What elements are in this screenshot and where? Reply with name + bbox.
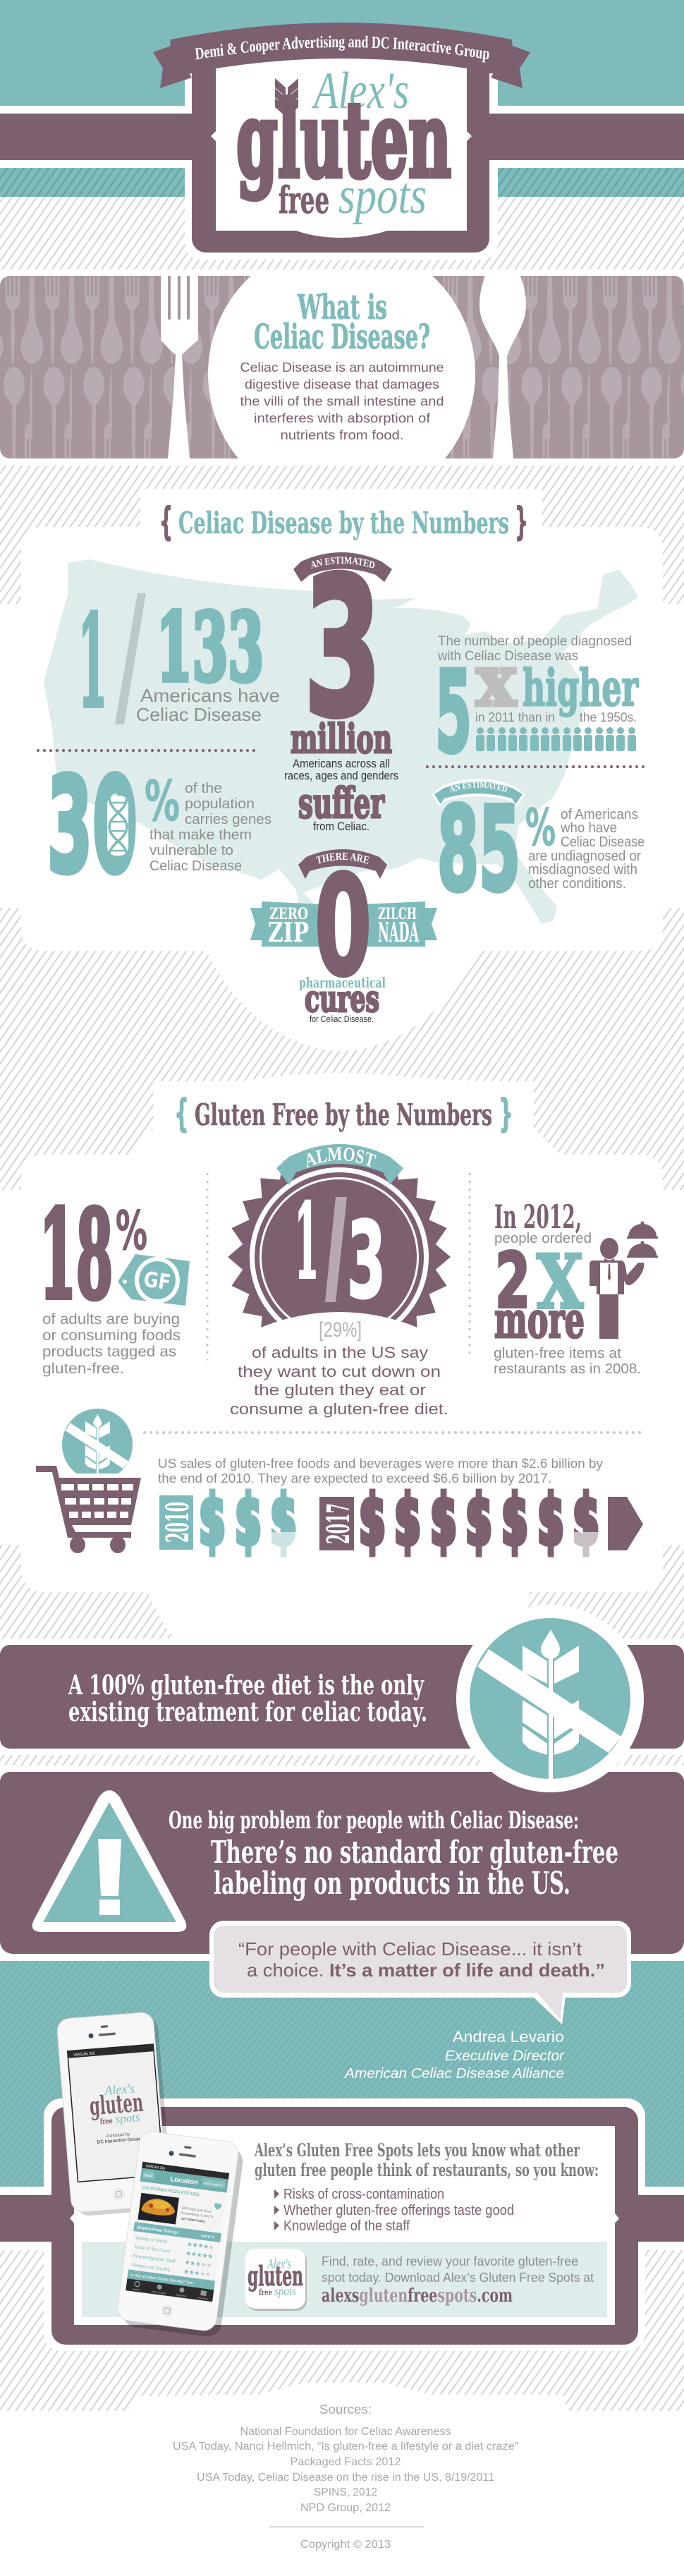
stat: 30 percent: vulnerable to bbox=[149, 843, 233, 858]
heading: { bbox=[159, 499, 173, 544]
stat: 3 million: 3 bbox=[304, 537, 381, 759]
icon: wheat bbox=[275, 78, 298, 116]
sales text: US sales of gluten-free foods and beverages were more than $2.6 billion by bbox=[158, 1456, 604, 1471]
stat: 18 percent bbox=[39, 1183, 190, 1377]
logo shield bbox=[153, 23, 530, 260]
stat: 0 cures: THERE ARE bbox=[316, 852, 370, 864]
icon: warning triangle bbox=[32, 1790, 186, 1932]
dollar chart 2010: 2010 bbox=[160, 1502, 196, 1543]
app icon: Alex's bbox=[267, 2256, 291, 2272]
stat: one third badge: ALMOST bbox=[306, 1147, 377, 1168]
map of the United States bbox=[44, 559, 639, 924]
footer: sources: SPINS, 2012 bbox=[314, 2486, 377, 2498]
phone: splash screen: gluten bbox=[88, 2088, 145, 2122]
stat: 2x more: more bbox=[494, 1291, 585, 1349]
ribbon text: Demi & Cooper Advertising and DC Interactive Group bbox=[195, 35, 489, 63]
dollar chart 2010: $ bbox=[199, 1481, 226, 1561]
download text: Find, rate, and review your favorite gluten-free bbox=[322, 2254, 578, 2268]
screen: Search bbox=[133, 2288, 140, 2292]
body text: Celiac Disease is an autoimmune bbox=[240, 360, 444, 375]
bullet list: Knowledge of the staff bbox=[283, 2218, 410, 2234]
screen: Is this location Celiac friendly? Yes bbox=[130, 2273, 193, 2285]
stat: 2x more bbox=[494, 1198, 658, 1377]
dollar chart 2017: $ bbox=[501, 1481, 528, 1561]
dollar chart 2017: $ bbox=[537, 1481, 564, 1561]
quote attribution: Andrea Levario bbox=[453, 2028, 564, 2046]
phone: splash screen: spots bbox=[115, 2110, 141, 2126]
stat: 3 million bbox=[284, 537, 398, 833]
stat: 30 percent: 30 bbox=[47, 749, 138, 902]
footer: sources: USA Today, Celiac Disease on the rise in the US, 8/19/2011 bbox=[197, 2472, 494, 2484]
stat: one third badge: 3 bbox=[347, 1200, 386, 1323]
banner: 100% gluten-free diet: existing treatment for celiac today. bbox=[68, 1696, 427, 1727]
logo text: spots bbox=[338, 167, 427, 225]
stat: one third badge: [29%] bbox=[319, 1318, 362, 1342]
screen: Add Location bbox=[152, 2290, 166, 2295]
stat: 5x higher: the 1950s. bbox=[580, 710, 637, 724]
stat: 18 percent: gluten-free. bbox=[42, 1361, 124, 1377]
screen: Gluten-Free Ratings bbox=[136, 2225, 179, 2235]
stat: 0 cures: ZERO bbox=[269, 905, 308, 923]
quote attribution: American Celiac Disease Alliance bbox=[344, 2066, 564, 2082]
panel: what is celiac disease bbox=[0, 276, 684, 458]
dollar chart 2017: 2017 bbox=[321, 1503, 357, 1544]
dollar chart 2017 bbox=[319, 1481, 643, 1561]
screen: Knowledgeable Staff bbox=[133, 2254, 176, 2264]
problem text bbox=[169, 1806, 618, 1902]
quote attribution: Executive Director bbox=[445, 2048, 565, 2064]
screen: Add Location bbox=[204, 2181, 223, 2187]
dollar chart 2017: $ bbox=[394, 1481, 421, 1561]
dollar chart 2010 bbox=[159, 1481, 300, 1561]
stat: 30 percent: population bbox=[185, 796, 255, 812]
bullet list: Whether gluten-free offerings taste good bbox=[283, 2203, 514, 2218]
screen: ★★★★★ bbox=[185, 2250, 214, 2260]
heading: Celiac Disease? bbox=[254, 317, 430, 357]
stat: 1 in 133: Americans have bbox=[140, 685, 280, 706]
stat: 5x higher bbox=[435, 634, 639, 778]
stat: 3 million: races, ages and genders bbox=[284, 769, 398, 782]
stat: 30 percent: carries genes bbox=[185, 812, 271, 827]
banner: 100% gluten-free diet: A 100% gluten-free diet is the only bbox=[68, 1669, 425, 1701]
promo text bbox=[254, 2140, 599, 2180]
screen: VIRGIN 3G bbox=[145, 2164, 165, 2171]
download text bbox=[322, 2254, 594, 2307]
phone: splash screen: DC Interactive Group bbox=[97, 2137, 140, 2145]
heading: } bbox=[499, 1091, 513, 1136]
phone: splash screen: Alex's bbox=[104, 2081, 135, 2098]
stat: 1 in 133: Celiac Disease bbox=[136, 704, 262, 725]
screen: 1060 East Golf Road bbox=[181, 2206, 212, 2213]
app icon: spots bbox=[274, 2284, 296, 2298]
download text: alexsglutenfreespots.com bbox=[322, 2285, 513, 2307]
app icon: free bbox=[259, 2288, 272, 2297]
stat: 2x more: In 2012, bbox=[494, 1198, 582, 1236]
stat: 18 percent: % bbox=[116, 1199, 147, 1262]
stat: one third badge: 1 bbox=[295, 1181, 319, 1302]
stat: 85 percent: other conditions. bbox=[528, 876, 626, 892]
app icon bbox=[245, 2249, 307, 2311]
stat: 2x more: X bbox=[537, 1238, 583, 1325]
screen: Restaurant Facility bbox=[131, 2263, 171, 2273]
stat: 2x more: gluten-free items at bbox=[494, 1346, 621, 1361]
screen: ★★★★★ bbox=[185, 2259, 212, 2269]
people row bbox=[476, 727, 636, 751]
arrow bbox=[608, 1497, 643, 1550]
heading: Celiac Disease by the Numbers bbox=[178, 506, 509, 540]
stat: 85 percent: 85 bbox=[437, 782, 520, 917]
dollar chart 2010: $ bbox=[270, 1481, 297, 1561]
footer: sources: USA Today, Nanci Hellmich, “Is gluten-free a lifestyle or a diet craze” bbox=[173, 2441, 518, 2453]
stat: 3 million: suffer bbox=[298, 779, 385, 827]
stat: 18 percent: or consuming foods bbox=[42, 1328, 181, 1344]
screen: ★★★★★ bbox=[183, 2268, 212, 2278]
stat: 0 cures: NADA bbox=[378, 916, 419, 948]
screen bbox=[126, 2162, 229, 2302]
icon: fork bbox=[161, 276, 198, 458]
stat: 0 cures bbox=[250, 846, 437, 1024]
banner: 100% gluten-free diet bbox=[0, 1645, 684, 1749]
icon: shopping cart with wheat bbox=[36, 1409, 148, 1553]
screen: Taste of the Food bbox=[134, 2244, 171, 2254]
plate bbox=[208, 276, 475, 458]
footer: sources: NPD Group, 2012 bbox=[300, 2502, 391, 2514]
heading bbox=[159, 499, 528, 544]
icon: dna bbox=[107, 796, 128, 856]
stat: 5x higher: 5 bbox=[435, 646, 472, 778]
heading: { bbox=[174, 1091, 189, 1136]
body text: interferes with absorption of bbox=[254, 411, 431, 425]
footer: sources: Copyright © 2013 bbox=[300, 2539, 391, 2551]
footer: sources: Packaged Facts 2012 bbox=[291, 2456, 401, 2468]
sales text: the end of 2010. They are expected to exceed $6.6 billion by 2017. bbox=[158, 1471, 551, 1486]
bullet list bbox=[274, 2187, 514, 2234]
panel: gluten free by the numbers bbox=[21, 1073, 663, 1639]
body text: nutrients from food. bbox=[281, 427, 403, 442]
stat: 85 percent: % bbox=[525, 798, 556, 857]
stat: 85 percent: who have bbox=[560, 820, 617, 836]
speech bubble quote bbox=[209, 1921, 631, 2024]
stat: 30 percent: that make them bbox=[149, 827, 252, 843]
stat: 0 cures: for Celiac Disease. bbox=[310, 1014, 374, 1024]
logo text: free bbox=[279, 179, 329, 222]
screen: Back bbox=[144, 2173, 153, 2179]
screen: RATE IT bbox=[201, 2234, 214, 2240]
stat: 85 percent: Celiac Disease bbox=[561, 834, 645, 850]
stat: 30 percent: Celiac Disease bbox=[149, 858, 242, 874]
stat: one third badge: consume a gluten-free diet. bbox=[230, 1400, 448, 1418]
stat: 5x higher: x bbox=[476, 639, 517, 722]
screen: Schaumburg, IL 60173 bbox=[181, 2211, 214, 2218]
heading: Gluten Free by the Numbers bbox=[195, 1098, 492, 1132]
stat: 18 percent: of adults are buying bbox=[42, 1311, 180, 1328]
stat: one third badge: they want to cut down on bbox=[238, 1363, 441, 1380]
photo bbox=[138, 2193, 179, 2225]
stat: 2x more: people ordered bbox=[494, 1231, 592, 1246]
panel: celiac disease by the numbers: } bbox=[515, 499, 528, 544]
phone: splash screen bbox=[56, 2012, 173, 2217]
speech bubble quote: a choice. It’s a matter of life and death.” bbox=[247, 1960, 605, 1981]
panel: labeling problem bbox=[0, 1772, 684, 1954]
stat: 30 percent: % bbox=[145, 770, 180, 834]
phone: splash screen: free bbox=[99, 2116, 113, 2126]
teal section white gap bbox=[0, 1954, 684, 1961]
stat: 3 million: AN ESTIMATED bbox=[311, 557, 375, 569]
phone: splash screen: A product by bbox=[106, 2132, 130, 2139]
stat: one third badge: the gluten they eat or bbox=[254, 1381, 427, 1399]
stat: 2x more: 2 bbox=[495, 1237, 530, 1325]
body text: digestive disease that damages bbox=[245, 377, 439, 391]
stat: one third badge bbox=[124, 1144, 560, 1741]
dollar chart 2017: $ bbox=[465, 1481, 492, 1561]
stat: 0 cures: 0 bbox=[314, 846, 372, 1007]
screen: Variety of Menu bbox=[135, 2235, 168, 2244]
quote attribution bbox=[344, 2028, 565, 2082]
download text: spot today. Download Alex’s Gluten Free Spots at bbox=[322, 2271, 594, 2285]
stat: 5x higher: with Celiac Disease was bbox=[437, 649, 578, 664]
stat: 3 million: million bbox=[291, 716, 392, 763]
logo text: gluten bbox=[236, 78, 451, 201]
logo header bbox=[153, 23, 530, 260]
stat: 85 percent: of Americans bbox=[561, 807, 638, 822]
stat: 1 in 133: 1 bbox=[78, 588, 107, 736]
stat: 1 in 133 bbox=[78, 588, 280, 736]
heading bbox=[174, 1091, 513, 1136]
dollar chart 2017: $ bbox=[573, 1481, 599, 1561]
stat: 3 million: from Celiac. bbox=[313, 820, 370, 833]
stat: 85 percent: are undiagnosed or bbox=[528, 849, 641, 864]
body text bbox=[240, 360, 444, 442]
screen: ★★★★★ bbox=[187, 2241, 215, 2251]
dollar chart 2017: $ bbox=[430, 1481, 457, 1561]
panel: celiac disease by the numbers bbox=[21, 489, 663, 1051]
stat: one third badge: of adults in the US say bbox=[252, 1344, 429, 1361]
speech bubble quote: “For people with Celiac Disease... it isn’t bbox=[238, 1938, 582, 1960]
phone: splash screen: VIRGIN 3G bbox=[73, 2052, 95, 2058]
stat: 5x higher: in 2011 than in bbox=[475, 710, 555, 724]
logo text bbox=[236, 62, 451, 225]
stat: 2x more: restaurants as in 2008. bbox=[494, 1361, 641, 1377]
body text: the villi of the small intestine and bbox=[240, 394, 444, 408]
screen: Favorites bbox=[176, 2294, 187, 2297]
heading bbox=[254, 288, 430, 357]
icon: waiter bbox=[590, 1222, 658, 1339]
download strip bbox=[82, 2242, 607, 2317]
stat: 0 cures: cures bbox=[305, 978, 379, 1021]
icon: spoon bbox=[480, 276, 526, 458]
dollar chart 2010: $ bbox=[235, 1481, 262, 1561]
stat: 18 percent: 18 bbox=[39, 1183, 113, 1326]
stat: 30 percent: of the bbox=[185, 781, 222, 796]
stat: 0 cures: ZIP bbox=[268, 916, 309, 948]
screen: GET DIRECTIONS bbox=[181, 2217, 206, 2223]
icon: gf tag: GF bbox=[142, 1268, 172, 1295]
panel: app promo bbox=[0, 2098, 684, 2351]
footer: sources: Sources: bbox=[319, 2402, 372, 2417]
logo text: Alex's bbox=[311, 62, 409, 120]
stat: 3 million: Americans across all bbox=[293, 757, 390, 770]
icon: no wheat circle bbox=[456, 1605, 644, 1792]
stat: 18 percent: products tagged as bbox=[42, 1344, 176, 1360]
footer: sources bbox=[0, 2383, 684, 2576]
bullet list: Risks of cross-contamination bbox=[283, 2187, 444, 2202]
stat: 5x higher: The number of people diagnosed bbox=[438, 634, 632, 649]
stat: 85 percent: misdiagnosed with bbox=[528, 862, 637, 877]
icon: gf tag bbox=[118, 1254, 190, 1306]
stat: 0 cures: ZILCH bbox=[378, 905, 417, 923]
stat: 1 in 133: 133 bbox=[157, 593, 264, 703]
screen: Location bbox=[170, 2175, 199, 2187]
heading: What is bbox=[297, 288, 387, 327]
footer: sources: National Foundation for Celiac Awareness bbox=[240, 2426, 451, 2438]
sales text bbox=[158, 1456, 604, 1486]
dollar chart 2017: $ bbox=[359, 1481, 386, 1561]
phone: restaurant screen bbox=[116, 2130, 245, 2338]
screen: CALIFORNIA PIZZA KITCHEN bbox=[142, 2185, 200, 2198]
stat: 85 percent: AN ESTIMATED bbox=[450, 782, 507, 793]
stat: 0 cures: pharmaceutical bbox=[299, 974, 386, 991]
screen: The Blog bbox=[197, 2297, 208, 2300]
app icon: gluten bbox=[248, 2260, 303, 2292]
